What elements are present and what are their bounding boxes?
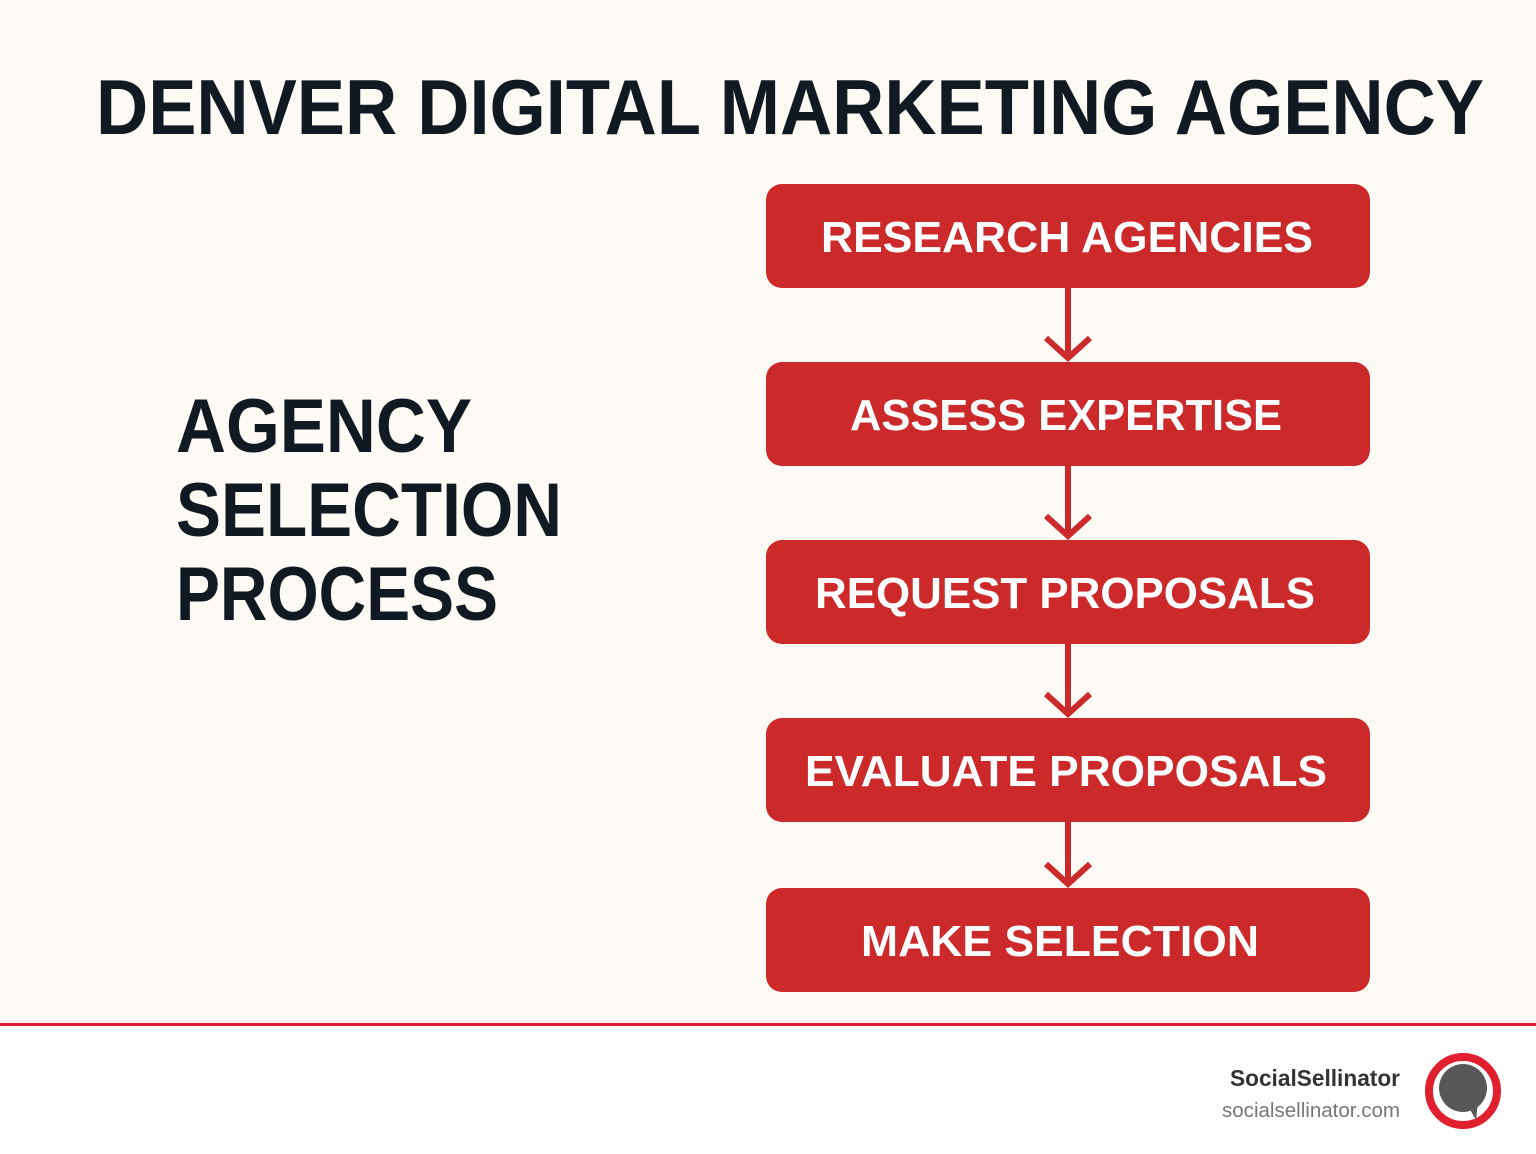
step 4: EVALUATE PROPOSALS <box>805 747 1327 796</box>
footer brand text: socialsellinator.com <box>1222 1100 1400 1122</box>
subtitle: agency selection process: PROCESS <box>176 552 498 637</box>
arrow 3 <box>1046 644 1090 714</box>
icon: logo <box>1429 1057 1497 1125</box>
step 5: MAKE SELECTION <box>861 917 1259 966</box>
subtitle: agency selection process <box>176 384 562 637</box>
step 3 <box>766 540 1370 644</box>
step 1 <box>766 184 1370 288</box>
subtitle: agency selection process: AGENCY <box>176 384 472 469</box>
step 3: REQUEST PROPOSALS <box>815 569 1315 618</box>
flowchart <box>766 184 1370 992</box>
subtitle: agency selection process: SELECTION <box>176 468 562 553</box>
arrow 1 <box>1046 288 1090 358</box>
step 2: ASSESS EXPERTISE <box>850 391 1282 440</box>
arrow 4 <box>1046 822 1090 884</box>
step 2 <box>766 362 1370 466</box>
arrow 2 <box>1046 466 1090 536</box>
step 1: RESEARCH AGENCIES <box>821 213 1313 262</box>
step 5 <box>766 888 1370 992</box>
step 4 <box>766 718 1370 822</box>
footer brand text <box>1222 1065 1400 1122</box>
footer brand text: SocialSellinator <box>1230 1065 1400 1091</box>
